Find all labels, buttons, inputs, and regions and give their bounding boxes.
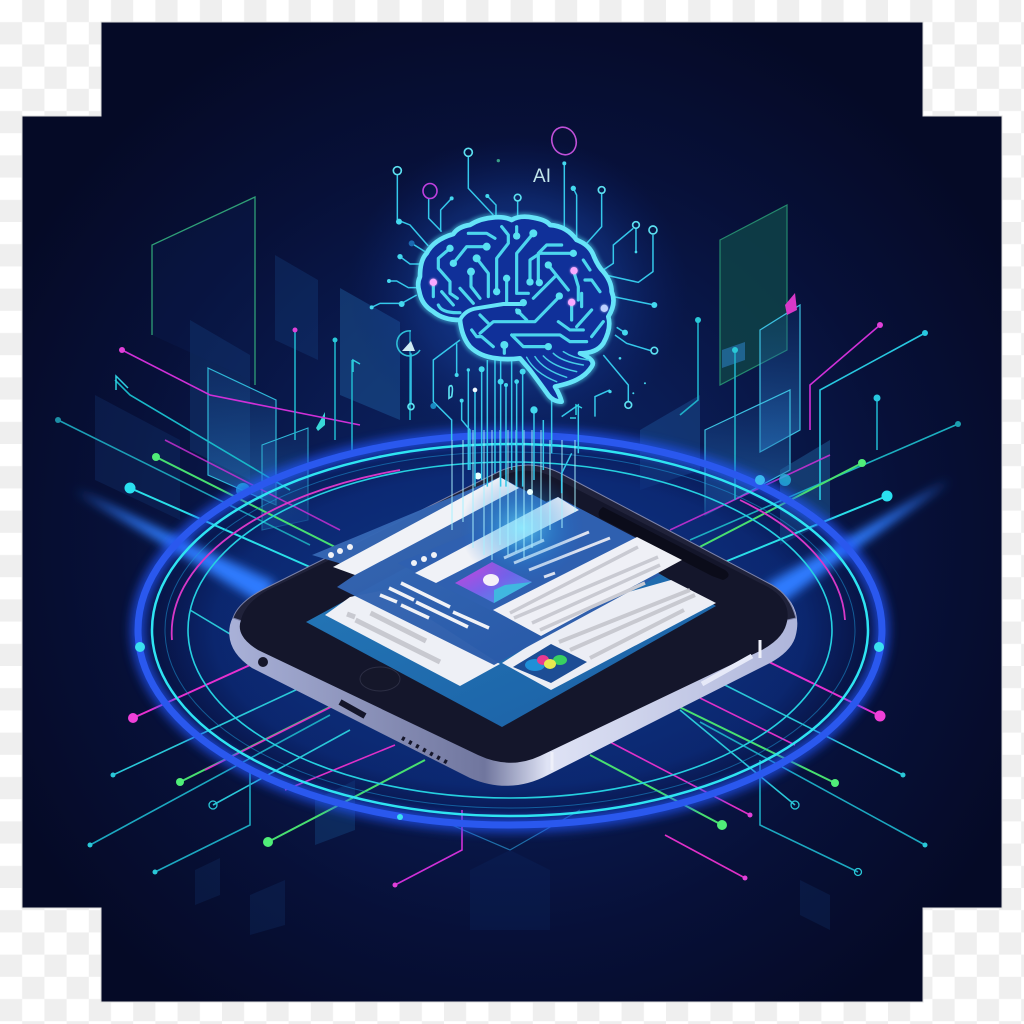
brain: bright outline with blue fill [418, 217, 614, 402]
circuit lines radiating from the phone [58, 320, 958, 885]
circuit line end nodes [55, 317, 961, 888]
layer: second browser window [398, 497, 640, 615]
circuit connections around the brain [372, 157, 654, 493]
phone: dark screen [240, 471, 788, 763]
phone: notch [599, 507, 729, 580]
layer: white lower-left card [325, 590, 500, 686]
image thumbnail [455, 562, 532, 603]
brain: trace terminals [446, 229, 577, 350]
layer: top white text card [493, 537, 682, 636]
layer: main blue window [312, 477, 660, 665]
brain [418, 217, 614, 402]
label: AI: AI [533, 166, 551, 187]
smartphone [229, 465, 797, 786]
glow: platform halo [138, 434, 882, 826]
light column from brain into the phone [452, 430, 584, 583]
glow: lens streaks [75, 480, 950, 606]
layer: white lower-right card [502, 580, 716, 690]
brain: circuit traces [433, 227, 603, 353]
brain glow [348, 135, 688, 445]
layer: blue base sheet [306, 540, 716, 727]
background translucent data towers [95, 197, 830, 935]
brain: magenta synapses [430, 267, 608, 312]
icons: floating music notes [116, 360, 582, 418]
phone: hardware details [258, 640, 760, 770]
brain: cerebellum stripes [527, 352, 588, 382]
icon: play triangle in ring [397, 331, 420, 356]
holographic rings around the phone [135, 435, 884, 825]
brain: blurred halo [418, 217, 614, 402]
circuit nodes and rings around the brain [370, 148, 658, 414]
window: second title strip [415, 497, 579, 583]
phone: thin dark top bezel [233, 465, 796, 640]
decorative magenta orbs [423, 124, 580, 198]
phone: home button [360, 667, 400, 691]
icon: colourful app tile [513, 644, 587, 683]
window: white title strip [333, 477, 519, 575]
phone: silver body edge [229, 465, 797, 786]
